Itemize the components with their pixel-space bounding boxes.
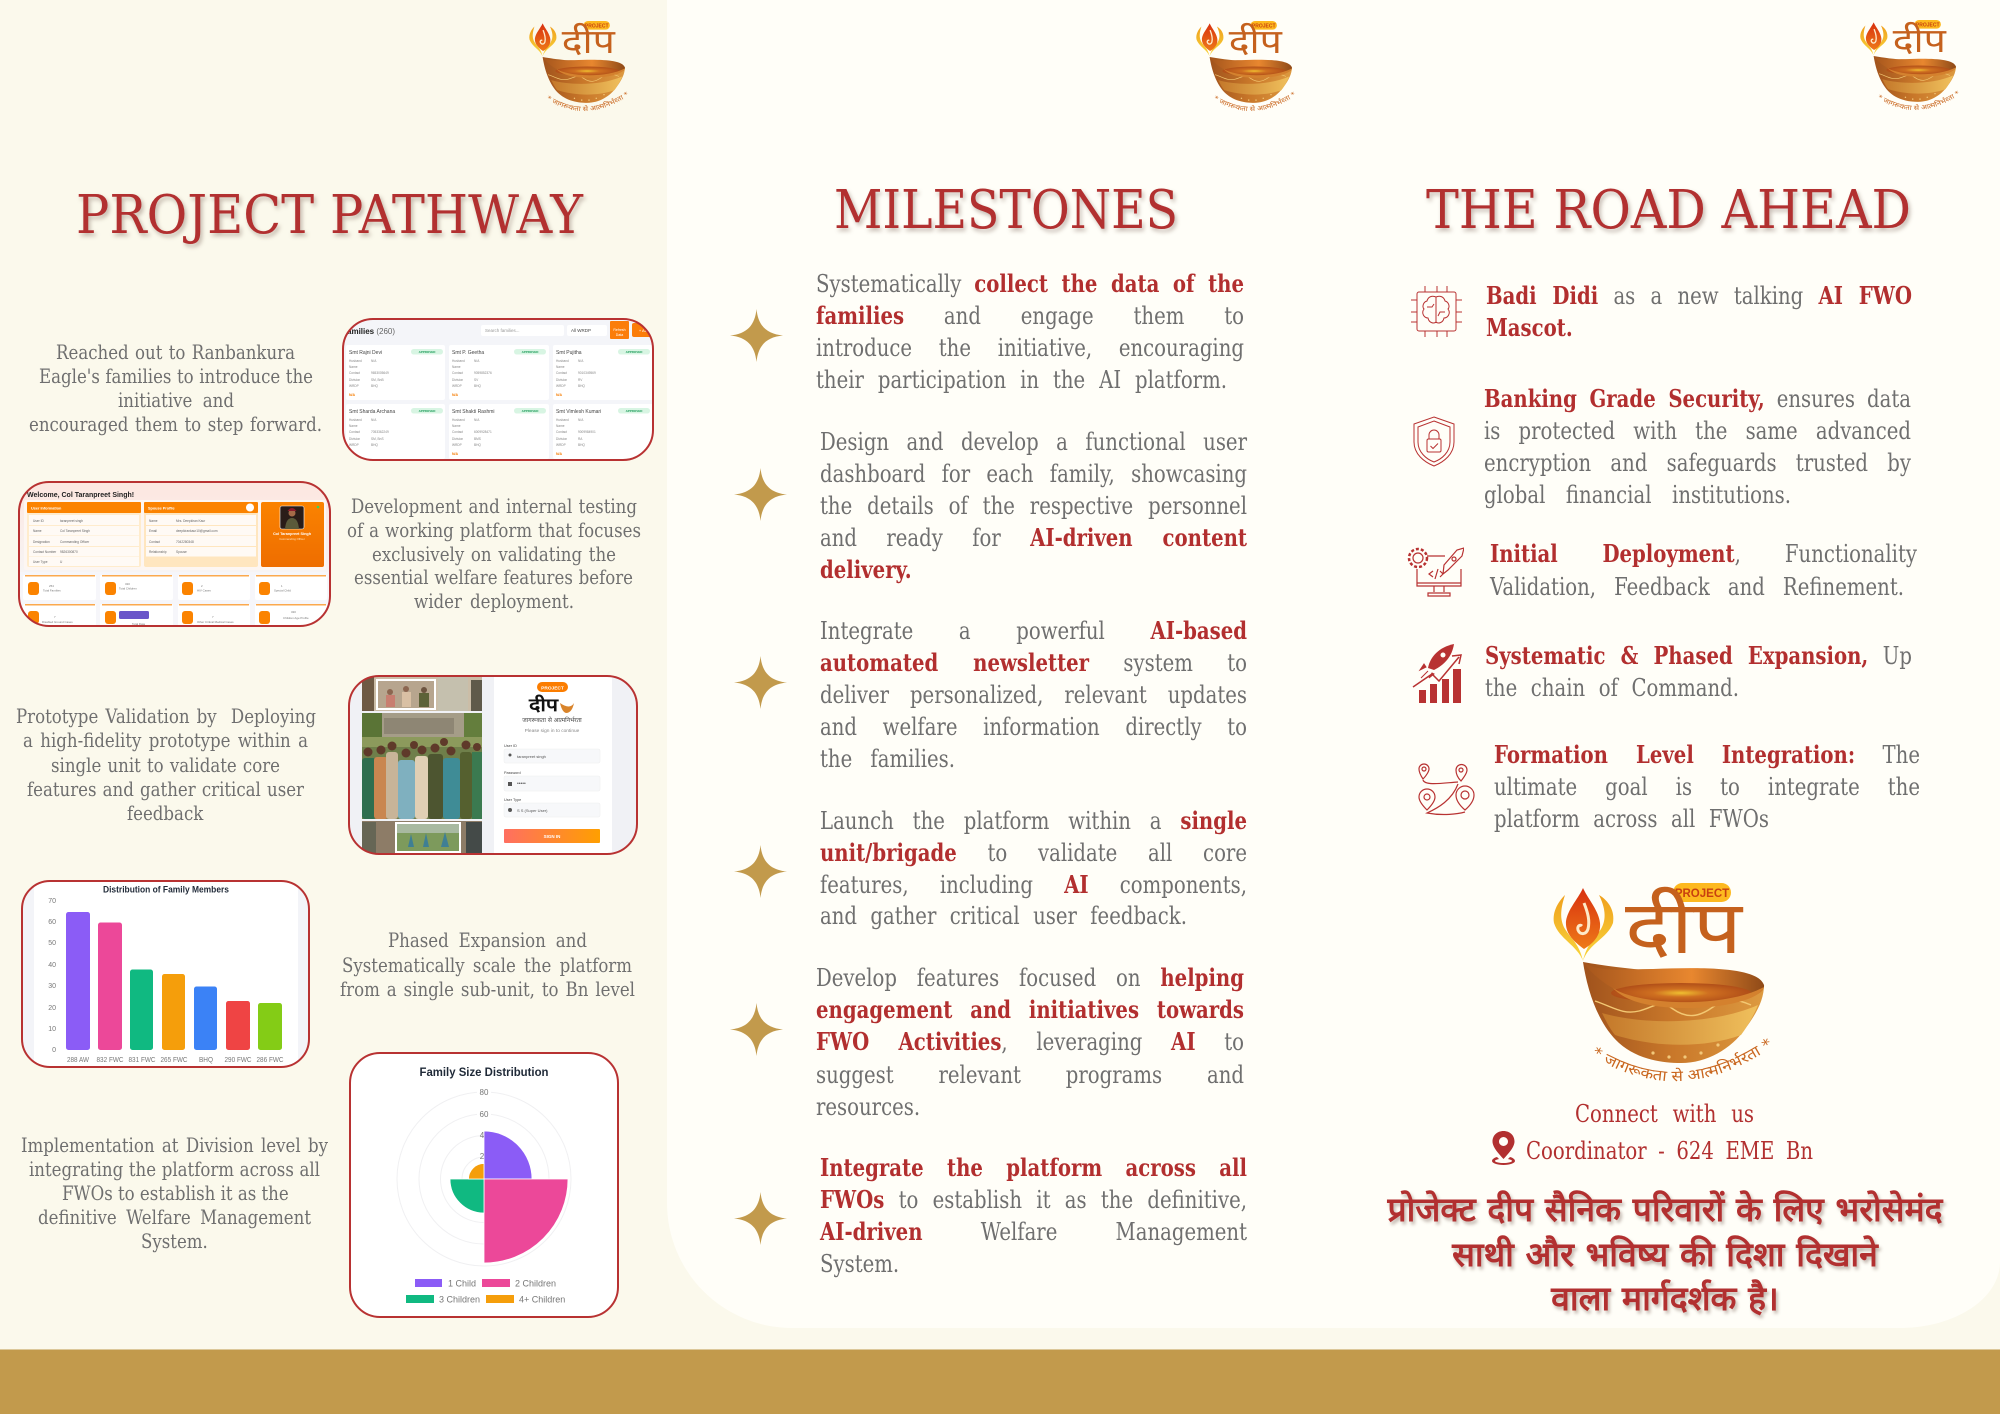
text: initial deployment bbox=[1490, 539, 1917, 601]
milestone text 4: Launch the platform within a single bbox=[820, 806, 1247, 835]
user information box: 9826300870 bbox=[60, 550, 78, 554]
family card 2: Contact bbox=[452, 371, 463, 375]
icon: rocket growth chart bbox=[1412, 644, 1462, 703]
spouse profile box: 7042280348 bbox=[176, 540, 194, 544]
user information box: taranpreet singh bbox=[60, 519, 83, 523]
header bar: Refresh bbox=[613, 328, 626, 332]
family card 1: N/A bbox=[349, 393, 356, 397]
text: initial deployment: Initial Deployment, Functionality bbox=[1490, 539, 1917, 568]
milestone text 3: the families. bbox=[820, 745, 955, 773]
login form: S S (Super User) bbox=[517, 808, 548, 813]
user information box bbox=[24, 500, 326, 570]
spouse profile box: Contact bbox=[149, 540, 160, 544]
spouse profile box: Relationship bbox=[149, 550, 167, 554]
text: pathway step 3: feedback bbox=[127, 801, 203, 825]
user information box: User Type bbox=[33, 560, 48, 564]
family card 3: Name bbox=[556, 365, 565, 369]
text: systematic expansion: the chain of Command. bbox=[1485, 674, 1739, 702]
family card 1: 9653005649 bbox=[371, 371, 389, 375]
family card 3: N/A bbox=[578, 359, 584, 363]
icon: security shield bbox=[1414, 416, 1454, 466]
text: pathway step 2: wider deployment. bbox=[414, 589, 573, 613]
bottom gold band bbox=[0, 1349, 2000, 1414]
milestone text 6: FWOs to establish it as the definitive, bbox=[820, 1185, 1247, 1214]
family card 2: APPROVED bbox=[522, 350, 539, 354]
ring labels: 60 bbox=[480, 1110, 489, 1119]
login form: Password bbox=[504, 771, 521, 775]
family card 3: APPROVED bbox=[626, 350, 643, 354]
milestone text 5: resources. bbox=[816, 1093, 920, 1121]
text: badi didi bbox=[1486, 281, 1912, 342]
family card 6: Division bbox=[556, 437, 567, 441]
spouse profile box: deepkirankaur10@gmail.com bbox=[176, 529, 218, 533]
text: pathway step 1: encouraged them to step forward. bbox=[29, 412, 322, 436]
family card 6: APPROVED bbox=[626, 409, 643, 413]
text: pathway step 2: exclusively on validating the bbox=[372, 542, 615, 566]
ring labels: 4 bbox=[480, 1131, 485, 1140]
stat tiles: Other Critical Medical Cases bbox=[197, 620, 234, 624]
text: pathway step 4: Systematically scale the platform bbox=[342, 953, 632, 977]
family card 6: Contact bbox=[556, 430, 567, 434]
text: pathway step 5: integrating the platform across all bbox=[29, 1157, 320, 1181]
family card 3: N/A bbox=[556, 393, 562, 397]
user information box: Col Taranpreet Singh bbox=[60, 529, 90, 533]
legend: 4+ Children bbox=[519, 1294, 565, 1304]
milestone text 1: Systematically collect the data of the bbox=[816, 269, 1244, 298]
y axis labels: 50 bbox=[48, 940, 56, 947]
stat tiles: 254 bbox=[49, 584, 54, 588]
stat tiles: Total Children bbox=[119, 586, 137, 590]
polar rings bbox=[397, 1092, 571, 1266]
y axis labels: 30 bbox=[48, 983, 56, 990]
family card 4: N/A bbox=[349, 452, 356, 456]
login form: Please sign in to continue bbox=[525, 728, 580, 734]
legend: 2 Children bbox=[515, 1278, 556, 1288]
polar chart: family size distribution bbox=[349, 1052, 619, 1318]
x axis labels: 831 FWC bbox=[128, 1055, 156, 1064]
header bar: + Add bbox=[639, 328, 649, 333]
family card 2: N/A bbox=[474, 359, 480, 363]
icon: deployment bbox=[1408, 547, 1464, 597]
text: banking grade security: global financial institutions. bbox=[1484, 481, 1791, 509]
spouse profile box bbox=[144, 502, 258, 567]
legend bbox=[406, 1278, 565, 1304]
family card 2: BHQ bbox=[474, 384, 481, 388]
login form: PROJECT bbox=[541, 685, 564, 691]
header bar bbox=[347, 321, 656, 339]
family card 4: WRDP bbox=[349, 443, 359, 447]
stat tiles: Total Data bbox=[132, 622, 145, 626]
family card 4 bbox=[346, 404, 445, 459]
officer profile tile bbox=[261, 502, 324, 567]
icon: ai brain chip bbox=[1411, 286, 1462, 337]
x axis labels: 832 FWC bbox=[96, 1055, 124, 1064]
milestone text 1: introduce the initiative, encouraging bbox=[816, 334, 1244, 362]
milestone text 3: deliver personalized, relevant updates bbox=[820, 681, 1247, 709]
big logo: * जागरूकता से आत्मनिर्भरता * bbox=[1594, 1038, 1770, 1082]
text: pathway step 2: Development and internal testing bbox=[350, 494, 636, 518]
milestone text 4: and gather critical user feedback. bbox=[820, 902, 1187, 930]
family card 3: 9010349569 bbox=[578, 371, 596, 375]
spouse profile box: Name bbox=[149, 519, 158, 523]
spouse profile box: Email bbox=[149, 529, 157, 533]
text: pathway step 1: Eagle's families to introduce the bbox=[39, 364, 313, 388]
milestone text 3: automated newsletter system to bbox=[820, 648, 1247, 677]
login form: ••••• bbox=[517, 781, 526, 787]
x axis labels: 290 FWC bbox=[224, 1055, 252, 1064]
text: pathway step 3 bbox=[16, 704, 316, 825]
text: banking grade security bbox=[1484, 384, 1911, 509]
family card 2 bbox=[449, 345, 549, 400]
bars bbox=[66, 912, 282, 1050]
family card 5 bbox=[449, 404, 549, 459]
x axis labels: 286 FWC bbox=[256, 1055, 284, 1064]
stat tiles: 320 bbox=[125, 582, 130, 586]
chart title: Distribution of Family Members bbox=[103, 884, 229, 894]
logo: left panel: PROJECT bbox=[585, 23, 609, 29]
milestone text 2: dashboard for each family, showcasing bbox=[820, 460, 1247, 488]
user information box: Commanding Officer bbox=[60, 540, 90, 544]
family card 1: APPROVED bbox=[419, 350, 436, 354]
family card 3: RV bbox=[578, 378, 583, 382]
logo: right panel: * जागरूकता से आत्मनिर्भरता * bbox=[1878, 90, 1958, 110]
spouse profile box: Spouse Profile bbox=[148, 506, 175, 510]
family card 2: Husband bbox=[452, 359, 465, 363]
milestone text 5: FWO Activities, leveraging AI to bbox=[816, 1027, 1244, 1056]
y axis labels: 60 bbox=[48, 919, 56, 926]
x axis labels: BHQ bbox=[199, 1055, 213, 1064]
family card 6: RA bbox=[578, 437, 583, 441]
milestone text 2 bbox=[820, 428, 1248, 584]
login form: User Type bbox=[504, 798, 521, 802]
family card 3: Contact bbox=[556, 371, 567, 375]
family card 4: APPROVED bbox=[419, 409, 436, 413]
text: pathway step 3: a high-fidelity prototype within a bbox=[23, 728, 308, 752]
family card 1: WRDP bbox=[349, 384, 359, 388]
family card 4: Husband bbox=[349, 418, 362, 422]
login form: दीप bbox=[528, 694, 559, 716]
text: systematic expansion bbox=[1485, 641, 1912, 702]
text: pathway step 2: of a working platform that focuses bbox=[346, 518, 640, 542]
user information box: Designation bbox=[33, 540, 50, 544]
big logo: PROJECT bbox=[1675, 888, 1729, 900]
officer profile tile: Col Taranpreet Singh bbox=[273, 532, 312, 536]
family card 5: N/A bbox=[474, 418, 480, 422]
family card 5: Contact bbox=[452, 430, 463, 434]
user information box: Name bbox=[33, 529, 42, 533]
milestone text 4: unit/brigade to validate all core bbox=[820, 838, 1247, 867]
family card 1: Smt Rajni Devi bbox=[349, 350, 382, 356]
family card 6: BHQ bbox=[578, 443, 585, 447]
text: pathway step 5: Implementation at Division level by bbox=[21, 1133, 328, 1157]
family card 5: N/A bbox=[452, 452, 458, 456]
text: badi didi: Mascot. bbox=[1486, 313, 1573, 342]
family card 5: APPROVED bbox=[522, 409, 539, 413]
photo collage bbox=[362, 677, 482, 854]
milestone text 5: Develop features focused on helping bbox=[816, 963, 1244, 992]
stat tiles: 320 bbox=[291, 610, 296, 614]
family card 1: Name bbox=[349, 365, 358, 369]
family card 3 bbox=[553, 345, 653, 400]
family card 5: BHQ bbox=[474, 443, 481, 447]
milestone text 2: the details of the respective personnel bbox=[820, 492, 1247, 520]
logo: right panel: PROJECT bbox=[1916, 22, 1940, 28]
hindi statement bbox=[1386, 1190, 1947, 1320]
milestone text 4: features, including AI components, bbox=[820, 870, 1247, 899]
family card 5: BMS bbox=[474, 437, 481, 441]
milestone text 3: Integrate a powerful AI-based bbox=[820, 616, 1247, 645]
hindi statement: वाला मार्गदर्शक है। bbox=[1551, 1279, 1779, 1318]
login form: User ID bbox=[504, 744, 517, 748]
text: pathway step 4: from a single sub-unit, to Bn level bbox=[340, 977, 635, 1001]
logo: centre panel: दीप bbox=[1229, 22, 1283, 61]
legend: 1 Child bbox=[448, 1278, 476, 1288]
spouse profile box: Mrs. Deepkiran Kaur bbox=[176, 519, 206, 523]
icon: location pin bbox=[1492, 1131, 1515, 1165]
text: pathway step 5: System. bbox=[141, 1229, 208, 1253]
family card 4: N/A bbox=[371, 418, 377, 422]
family card 6: WRDP bbox=[556, 443, 566, 447]
stat tiles: 7 bbox=[212, 615, 214, 619]
family card 4: BHQ bbox=[371, 443, 378, 447]
milestone text 1: their participation in the AI platform. bbox=[816, 366, 1227, 394]
wedges bbox=[450, 1131, 568, 1263]
hindi statement: प्रोजेक्ट दीप सैनिक परिवारों के लिए भरोसेमंद bbox=[1387, 1190, 1943, 1229]
family card 6: Name bbox=[556, 424, 565, 428]
chart title: Family Size Distribution bbox=[420, 1065, 548, 1079]
ring labels: 80 bbox=[480, 1088, 489, 1097]
text: pathway step 2 bbox=[346, 494, 640, 613]
text: pathway step 3: single unit to validate core bbox=[51, 753, 280, 777]
milestone star 5 bbox=[730, 1003, 783, 1056]
ring labels bbox=[477, 1087, 491, 1161]
family card 1 bbox=[346, 345, 445, 400]
text: badi didi: Badi Didi as a new talking AI FWO bbox=[1486, 281, 1912, 310]
family card 1: Division bbox=[349, 378, 360, 382]
ring labels: 2 bbox=[480, 1152, 485, 1161]
family card 2: SV bbox=[474, 378, 479, 382]
milestone text 6: Integrate the platform across all bbox=[820, 1153, 1247, 1182]
family card 4: Name bbox=[349, 424, 358, 428]
stat tiles: Special Child bbox=[274, 588, 291, 592]
milestone text 2: and ready for AI-driven content bbox=[820, 523, 1247, 552]
milestone text 6: System. bbox=[820, 1250, 899, 1278]
login form: जागरूकता से आत्मनिर्भरता bbox=[522, 716, 582, 724]
text: formation level integration: Formation Level Integration: The bbox=[1494, 740, 1920, 769]
family card 2: N/A bbox=[452, 393, 458, 397]
family card 6: N/A bbox=[556, 452, 562, 456]
text: pathway step 2: essential welfare features before bbox=[354, 565, 632, 589]
user information box: User Information bbox=[31, 506, 62, 510]
header bar: All WRDP bbox=[571, 328, 591, 333]
bar chart: distribution of family members bbox=[21, 880, 310, 1068]
stat tiles: Children Age Profile bbox=[283, 616, 309, 620]
family card 3: Division bbox=[556, 378, 567, 382]
text: formation level integration: platform across all FWOs bbox=[1494, 805, 1769, 833]
y axis labels: 20 bbox=[48, 1005, 56, 1012]
text: banking grade security: encryption and safeguards trusted by bbox=[1484, 449, 1911, 477]
stat tiles: 1 bbox=[281, 584, 283, 588]
family card 5: Smt Shakti Rashmi bbox=[452, 409, 495, 415]
logo: centre panel: * जागरूकता से आत्मनिर्भरता * bbox=[1214, 92, 1294, 112]
milestone text 6 bbox=[820, 1153, 1247, 1278]
milestone text 2: delivery. bbox=[820, 555, 912, 584]
family card 5: Husband bbox=[452, 418, 465, 422]
text: pathway step 5: FWOs to establish it as the bbox=[62, 1181, 289, 1205]
text: pathway step 1: Reached out to Ranbankura bbox=[56, 340, 295, 364]
text: pathway step 4: Phased Expansion and bbox=[388, 928, 587, 952]
family card 5: WRDP bbox=[452, 443, 462, 447]
family card 4: Smt Sharda Archana bbox=[349, 409, 395, 415]
logo: centre panel bbox=[1196, 21, 1294, 112]
family card 1: Husband bbox=[349, 359, 362, 363]
family card 1: BHQ bbox=[371, 384, 378, 388]
logo: right panel bbox=[1860, 20, 1958, 110]
milestone text 6: AI-driven Welfare Management bbox=[820, 1217, 1247, 1246]
family card 4: Division bbox=[349, 437, 360, 441]
logo: left panel: * जागरूकता से आत्मनिर्भरता * bbox=[548, 92, 628, 112]
logo: right panel: दीप bbox=[1893, 21, 1947, 60]
family card 5: Name bbox=[452, 424, 461, 428]
logo: left panel bbox=[529, 21, 628, 112]
hindi statement: साथी और भविष्य की दिशा दिखाने bbox=[1452, 1235, 1878, 1274]
family card 1: SM, BnB bbox=[371, 378, 384, 382]
text: banking grade security: Banking Grade Security, ensures data bbox=[1484, 384, 1911, 413]
header bar: amilies (260) bbox=[347, 327, 395, 336]
screenshot card: login page bbox=[348, 675, 638, 855]
legend: 3 Children bbox=[439, 1294, 480, 1304]
right panel background bbox=[667, 0, 2000, 1328]
stat tiles: 7 bbox=[54, 615, 56, 619]
family card 2: Smt P. Geetha bbox=[452, 350, 484, 356]
big logo bbox=[1554, 883, 1770, 1082]
logo: left panel: दीप bbox=[562, 22, 616, 61]
y axis labels: 40 bbox=[48, 962, 56, 969]
family card 1: Contact bbox=[349, 371, 360, 375]
family card 2: Division bbox=[452, 378, 463, 382]
family card 4: 7053362249 bbox=[371, 430, 389, 434]
big logo: दीप bbox=[1625, 885, 1744, 971]
text: coordinator: Coordinator - 624 EME Bn bbox=[1526, 1137, 1813, 1165]
family card 3: WRDP bbox=[556, 384, 566, 388]
family card 3: Smt Pujitha bbox=[556, 350, 582, 356]
family card 6: N/A bbox=[578, 418, 584, 422]
milestone text 1 bbox=[816, 269, 1244, 394]
family card 2: Name bbox=[452, 365, 461, 369]
milestone text 2: Design and develop a functional user bbox=[820, 428, 1247, 456]
header bar: Data bbox=[616, 333, 623, 337]
y axis labels: 10 bbox=[48, 1026, 56, 1033]
milestone text 3: and welfare information directly to bbox=[820, 713, 1247, 741]
stat tiles: Total Families bbox=[43, 588, 61, 592]
x axis labels bbox=[67, 1055, 284, 1064]
stat tiles: HIV Cases bbox=[197, 588, 211, 592]
y axis labels: 70 bbox=[48, 898, 56, 905]
milestone star 3 bbox=[734, 656, 787, 709]
stat tiles bbox=[23, 575, 327, 628]
login form: SIGN IN bbox=[544, 834, 560, 839]
icon: map route pins bbox=[1418, 763, 1475, 816]
stat tiles: Disabled Ground Cases bbox=[42, 620, 73, 624]
milestone star 4 bbox=[734, 845, 787, 898]
milestone star 6 bbox=[734, 1192, 787, 1245]
user information box: U bbox=[60, 560, 63, 564]
login form bbox=[494, 676, 612, 854]
family card 2: WRDP bbox=[452, 384, 462, 388]
family card 3: Husband bbox=[556, 359, 569, 363]
screenshot card: welcome dashboard bbox=[18, 481, 331, 627]
text: pathway step 3: features and gather critical user bbox=[27, 777, 304, 801]
user information box: User ID bbox=[33, 519, 45, 523]
milestone text 1: families and engage them to bbox=[816, 301, 1244, 330]
text: banking grade security: is protected with the same advanced bbox=[1484, 417, 1911, 445]
family card 5: 6009928471 bbox=[474, 430, 492, 434]
text: pathway step 5 bbox=[21, 1133, 328, 1253]
family card 6: 9009984901 bbox=[578, 430, 596, 434]
welcome heading: Welcome, Col Taranpreet Singh! bbox=[27, 492, 134, 499]
milestone text 5 bbox=[816, 963, 1244, 1121]
text: formation level integration: ultimate goal is to integrate the bbox=[1494, 773, 1920, 801]
text: formation level integration bbox=[1494, 740, 1920, 833]
milestone text 4 bbox=[820, 806, 1247, 930]
stat tiles: 2 bbox=[201, 584, 203, 588]
logo: centre panel: PROJECT bbox=[1252, 23, 1276, 29]
login form: taranpreet singh bbox=[517, 754, 546, 759]
family card 3: BHQ bbox=[578, 384, 585, 388]
family card 5: Division bbox=[452, 437, 463, 441]
text: pathway step 4 bbox=[340, 928, 635, 1001]
text: pathway step 1 bbox=[29, 340, 322, 436]
family card 6 bbox=[553, 404, 653, 459]
y axis labels bbox=[48, 898, 56, 1054]
officer profile tile: Commanding Officer bbox=[279, 537, 305, 541]
text: pathway step 3: Prototype Validation by Deploying bbox=[16, 704, 316, 728]
milestone text 3 bbox=[820, 616, 1247, 773]
header bar: Search families... bbox=[485, 328, 520, 333]
family card 2: 9059852376 bbox=[474, 371, 492, 375]
family card 4: Contact bbox=[349, 430, 360, 434]
y axis labels: 0 bbox=[52, 1047, 56, 1054]
x axis labels: 265 FWC bbox=[160, 1055, 188, 1064]
text: systematic expansion: Systematic & Phased Expansion, Up bbox=[1485, 641, 1912, 670]
milestone star 1 bbox=[730, 309, 783, 362]
milestone text 5: engagement and initiatives towards bbox=[816, 995, 1244, 1024]
x axis labels: 288 AW bbox=[67, 1055, 90, 1064]
milestone text 5: suggest relevant programs and bbox=[816, 1061, 1244, 1089]
text: initial deployment: Validation, Feedback and Refinement. bbox=[1490, 573, 1904, 601]
family card 6: Husband bbox=[556, 418, 569, 422]
text: connect with us: Connect with us bbox=[1575, 1100, 1754, 1128]
family card 1: N/A bbox=[371, 359, 377, 363]
family card 4: SM, BnS bbox=[371, 437, 384, 441]
text: pathway step 5: definitive Welfare Management bbox=[38, 1205, 311, 1229]
spouse profile box: Spouse bbox=[176, 550, 187, 554]
family card 6: Smt Vimlesh Kumari bbox=[556, 409, 601, 415]
text: pathway step 1: initiative and bbox=[118, 388, 234, 412]
milestone star 2 bbox=[734, 468, 787, 521]
user information box: Contact Number bbox=[33, 550, 57, 554]
screenshot card: families list bbox=[342, 318, 654, 461]
